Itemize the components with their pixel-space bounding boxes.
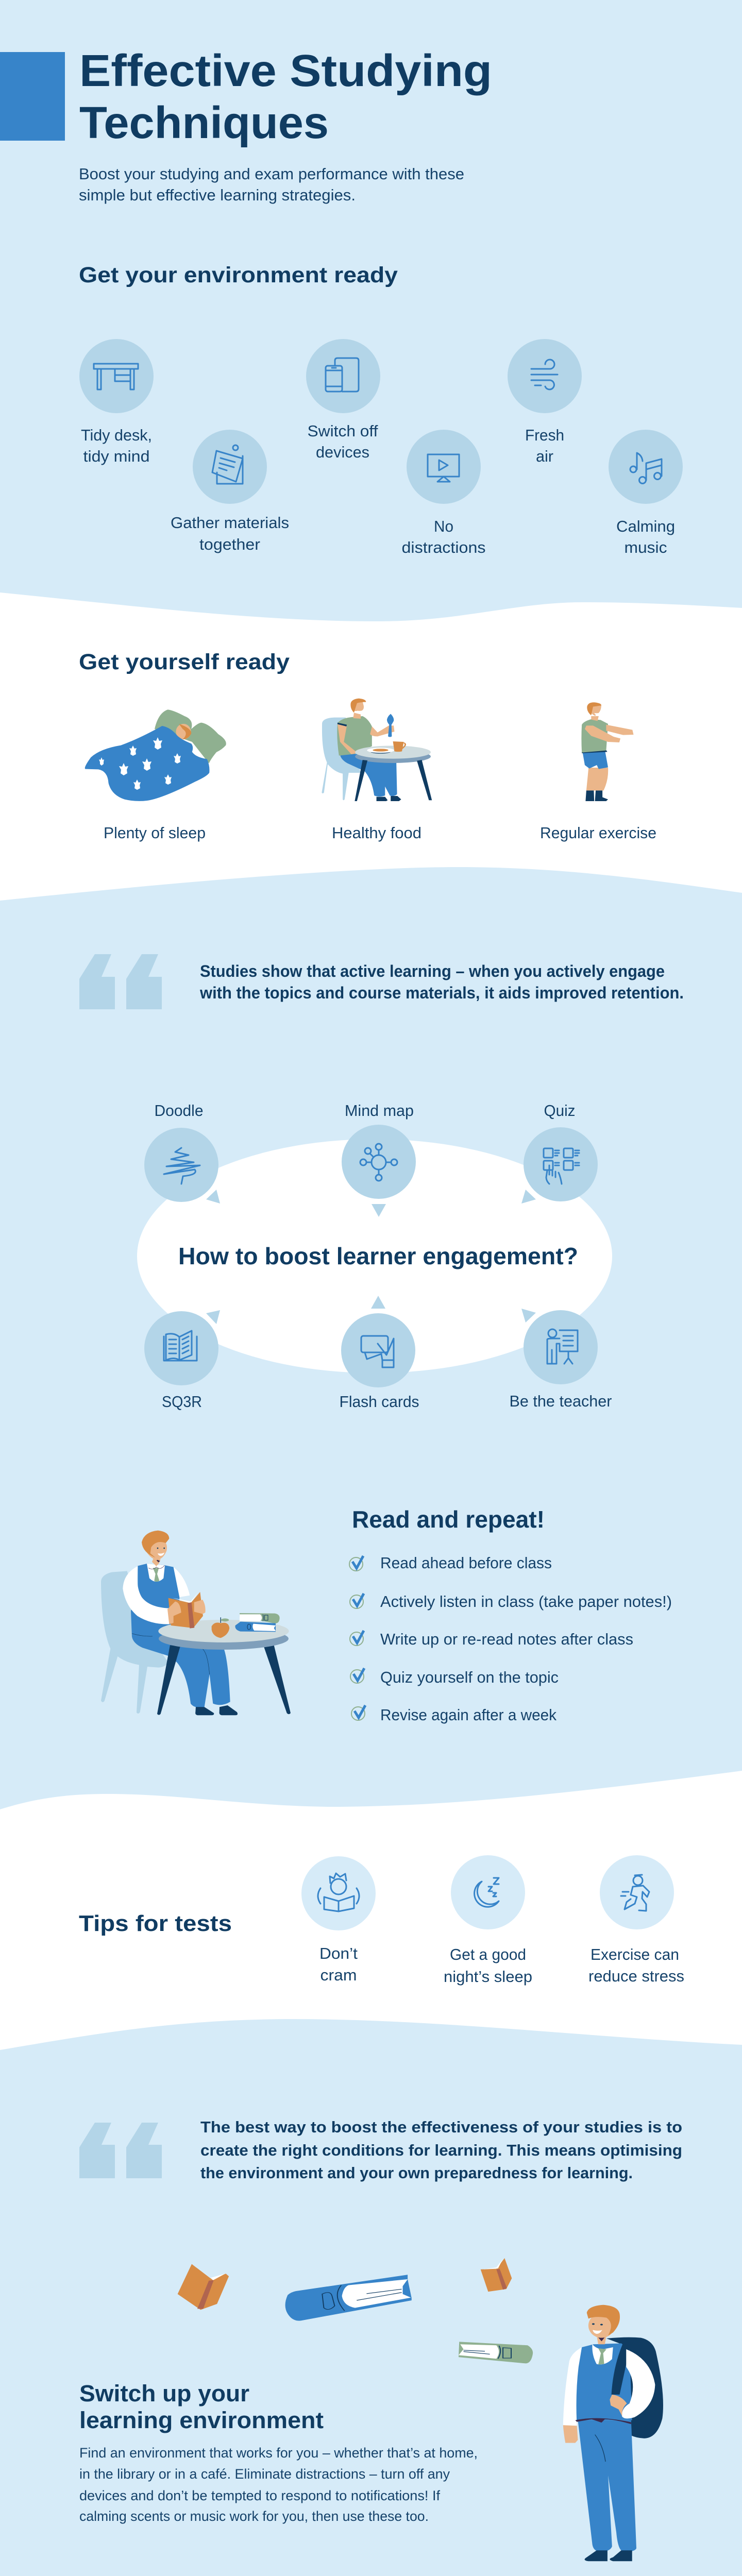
illustration: flying books — [178, 2258, 533, 2363]
item: gather materials: together — [199, 535, 260, 553]
illustration: student reading at table — [101, 1531, 291, 1715]
item: don't cram — [301, 1856, 376, 1984]
item: quiz — [524, 1101, 598, 1201]
intro text — [79, 165, 464, 204]
intro text: Boost your studying and exam performance with these — [79, 165, 464, 183]
body text: switch up: calming scents or music work for you, then use these too. — [79, 2509, 429, 2524]
quote: active learning — [79, 954, 684, 1009]
item: don't cram: cram — [321, 1966, 357, 1984]
heading: switch up your learning environment: learning environment — [79, 2407, 324, 2433]
quote: best way to boost — [79, 2118, 682, 2182]
check item: revise again: Revise again after a week — [380, 1706, 556, 1724]
check item: write up: Write up or re-read notes after class — [380, 1630, 633, 1648]
heading: get yourself ready: Get yourself ready — [79, 650, 290, 674]
body text: switch up: devices and don’t be tempted to respond to notifications! If — [79, 2488, 440, 2503]
illustration: person eating — [322, 699, 432, 801]
item: calming music — [609, 430, 683, 556]
panel: how to boost learner engagement — [137, 1101, 612, 1411]
quote text: Studies show that active learning – when you actively engage — [200, 962, 665, 980]
icon: quote marks — [79, 2123, 162, 2178]
checklist — [349, 1554, 672, 1724]
item: don't cram: Don’t — [319, 1944, 358, 1962]
item: flash cards — [339, 1313, 419, 1411]
quote text: create the right conditions for learning. This means optimising — [200, 2141, 682, 2159]
panel: get yourself ready — [79, 650, 656, 842]
item: no distractions: distractions — [402, 538, 485, 556]
item: no distractions — [402, 430, 485, 556]
heading: read and repeat: Read and repeat! — [352, 1506, 545, 1533]
title: Effective Studying — [79, 46, 492, 96]
title — [79, 46, 492, 148]
item: good night's sleep: night’s sleep — [444, 1968, 532, 1986]
item: tidy desk: tidy mind — [83, 447, 149, 465]
item: sq3r: SQ3R — [162, 1393, 202, 1411]
body text: switch up — [79, 2445, 478, 2524]
heading: switch up your learning environment — [79, 2380, 324, 2433]
item: calming music: Calming — [616, 517, 675, 535]
panel: switch up your learning environment — [79, 2258, 663, 2561]
heading: how to boost learner engagement: How to boost learner engagement? — [178, 1243, 578, 1269]
check item: read ahead: Read ahead before class — [380, 1554, 552, 1572]
title accent block — [0, 52, 65, 141]
panel: tips for tests — [79, 1855, 684, 1986]
quote text — [199, 962, 684, 1002]
heading: switch up your learning environment: Switch up your — [79, 2380, 249, 2406]
panel: read and repeat — [101, 1506, 672, 1724]
item: fresh air: air — [536, 447, 553, 465]
illustration: student with backpack — [563, 2305, 663, 2561]
item: fresh air: Fresh — [525, 426, 564, 444]
item: gather materials — [171, 430, 289, 553]
heading: get your environment ready: Get your environment ready — [79, 263, 398, 287]
item: tidy desk — [79, 339, 154, 465]
item: good night's sleep — [444, 1855, 532, 1986]
quote text: the environment and your own preparedness for learning. — [200, 2164, 633, 2182]
check item: actively listen: Actively listen in class (take paper notes!) — [380, 1592, 672, 1611]
body text: switch up: in the library or in a café. Eliminate distractions – turn off any — [79, 2466, 450, 2482]
panel: get your environment ready — [79, 263, 683, 556]
quote text — [200, 2118, 682, 2182]
item: fresh air — [508, 339, 582, 465]
item: doodle: Doodle — [155, 1101, 203, 1120]
quote text: with the topics and course materials, it aids improved retention. — [199, 984, 684, 1002]
item: switch off devices: devices — [316, 443, 369, 461]
item: switch off devices: Switch off — [307, 422, 378, 440]
heading: tips for tests: Tips for tests — [79, 1911, 232, 1936]
label: healthy food: Healthy food — [332, 824, 421, 842]
item: flash cards: Flash cards — [339, 1393, 419, 1411]
item: no distractions: No — [434, 517, 453, 535]
item: be the teacher: Be the teacher — [509, 1392, 612, 1410]
item: exercise reduces stress: reduce stress — [588, 1967, 684, 1985]
item: exercise reduces stress: Exercise can — [591, 1945, 679, 1963]
item: calming music: music — [625, 538, 667, 556]
item: good night's sleep: Get a good — [450, 1945, 526, 1963]
item: gather materials: Gather materials — [171, 514, 289, 532]
icon: quote marks — [79, 954, 162, 1009]
item: mind map: Mind map — [345, 1101, 414, 1120]
item: exercise reduces stress — [588, 1855, 684, 1985]
label: regular exercise: Regular exercise — [540, 824, 656, 842]
check item: quiz yourself: Quiz yourself on the topic — [380, 1668, 559, 1686]
item: tidy desk: Tidy desk, — [81, 426, 152, 444]
item: doodle — [144, 1101, 218, 1202]
body text: switch up: Find an environment that works for you – whether that’s at home, — [79, 2445, 478, 2461]
title: Techniques — [79, 98, 329, 148]
arrows — [206, 1190, 536, 1324]
item: sq3r — [144, 1311, 218, 1411]
label: plenty of sleep: Plenty of sleep — [104, 824, 206, 842]
quote text: The best way to boost the effectiveness of your studies is to — [200, 2118, 682, 2136]
item: mind map — [342, 1101, 416, 1199]
item: quiz: Quiz — [544, 1101, 575, 1120]
item: be the teacher — [509, 1310, 612, 1410]
illustration: person exercising — [581, 702, 633, 801]
central ellipse — [137, 1139, 612, 1373]
illustration: sleeping person — [85, 709, 226, 801]
intro text: simple but effective learning strategies. — [79, 186, 356, 204]
item: switch off devices — [306, 339, 380, 461]
